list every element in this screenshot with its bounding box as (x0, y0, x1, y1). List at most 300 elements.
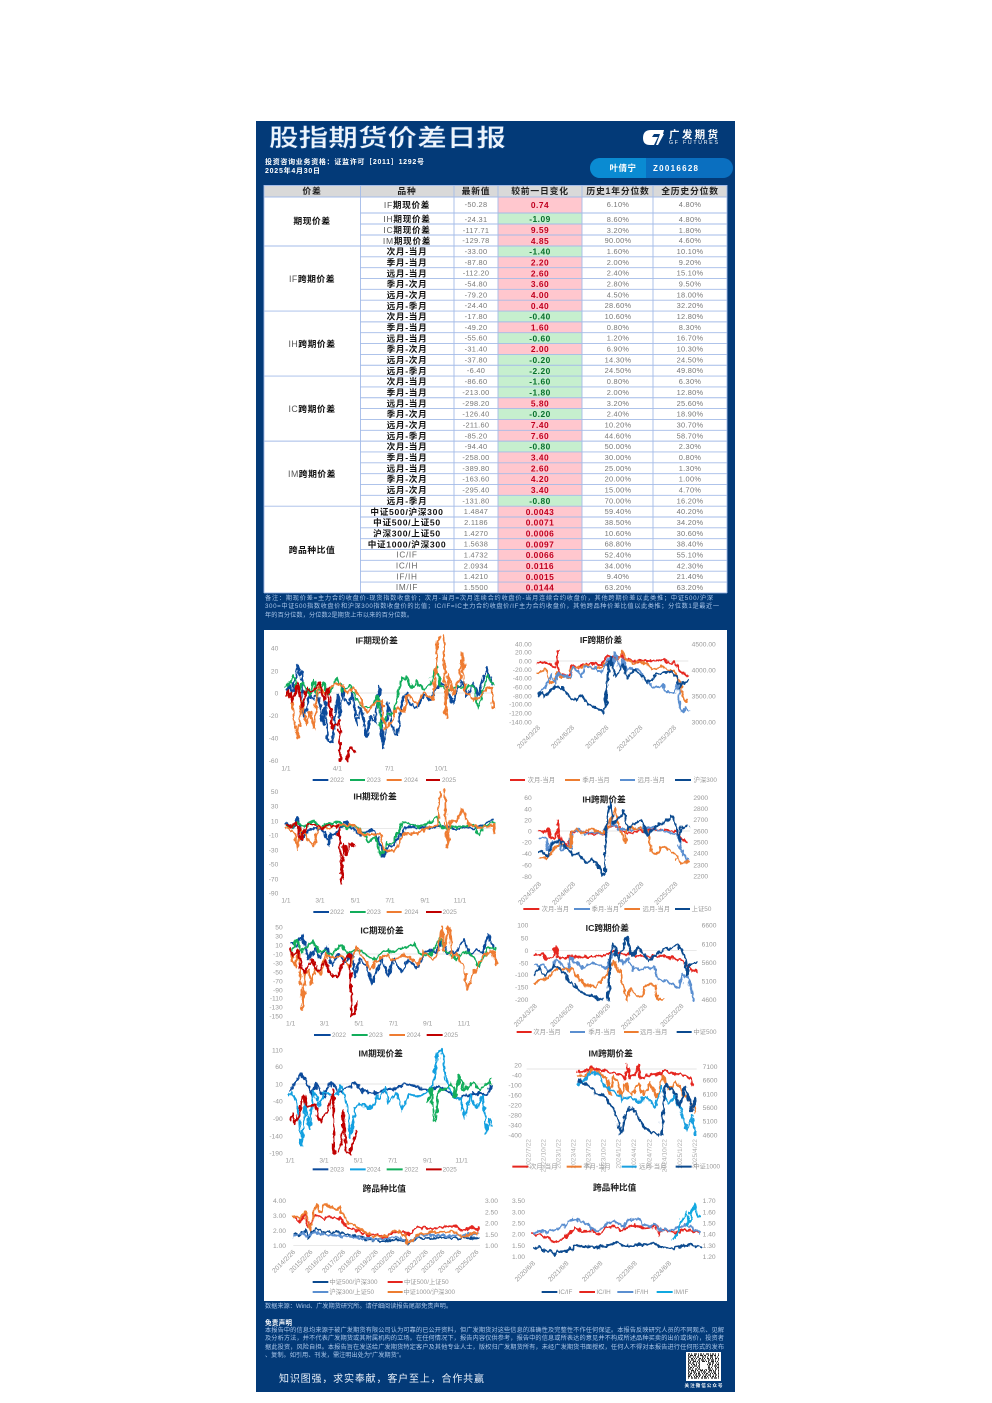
block: IC跨期价差 rows: -126.40 (462, 410, 490, 419)
chart: IM跨期价差: 6100 (703, 1091, 718, 1098)
chart: IC期现价差: IC期现价差 (360, 924, 404, 935)
block: IF跨期价差 rows: 2.40% (607, 269, 629, 278)
block: IM跨期价差 rows: 远月-当月 (387, 462, 427, 473)
chart: 跨品种比值 right: 3.50 (512, 1198, 525, 1205)
block: IC跨期价差 rows: -1.60 (529, 377, 551, 387)
chart: IM跨期价差: -40 (512, 1072, 522, 1079)
chart: IF跨期价差: 2024/3/28 (516, 724, 542, 750)
chart: 跨品种比值 left: 2019/2/26 (354, 1249, 380, 1275)
block: 跨品种比值 rows: 中证500/上证50 (373, 517, 441, 528)
block: IC跨期价差 rows: 25.60% (677, 399, 704, 408)
block: IM跨期价差 rows: 50.00% (605, 442, 632, 451)
chart: IF期现价差: 7/1 (385, 765, 394, 772)
chart: IC期现价差 (269, 924, 496, 1039)
block: IC跨期价差 rows: 季月-次月 (387, 408, 427, 419)
legend (523, 904, 712, 913)
table footnote: 300=中证500指数收盘价和沪深300指数收盘价的比值；IC/IF=IC主力合约收盘价/IF主力合约收盘价，其他跨品种价差比值以此类推；分位数1是最近一 (265, 602, 719, 610)
chart: IH跨期价差: 2024/3/28 (517, 881, 543, 907)
chart: IC期现价差: 9/1 (423, 1020, 433, 1027)
block: IC跨期价差 rows: 30.70% (677, 420, 704, 429)
block: 期现价差 rows (383, 197, 701, 246)
block: IF跨期价差 rows: -33.00 (465, 247, 487, 256)
block: IF跨期价差 rows: 32.20% (677, 301, 704, 310)
chart: 跨品种比值 left: 2.00 (485, 1221, 498, 1228)
block: IM跨期价差 rows: 15.00% (605, 485, 632, 494)
block: IH跨期价差 rows: -17.80 (465, 312, 487, 321)
chart: IM跨期价差: 2022/10/22 (540, 1139, 547, 1172)
row labels: left column: 期现价差 (293, 215, 331, 226)
block: IH跨期价差 rows: 49.80% (677, 366, 704, 375)
chart: IH期现价差: 1/1 (281, 897, 291, 904)
block: IH跨期价差 rows: 次月-当月 (387, 311, 427, 322)
block: IH跨期价差 rows: -49.20 (465, 323, 487, 332)
legend: IF/IH (635, 1289, 649, 1296)
block: IF跨期价差 rows: 10.10% (677, 247, 704, 256)
icon: QR code (684, 1352, 723, 1389)
chart: IH期现价差: 50 (271, 789, 279, 796)
block: 跨品种比值 rows: 0.0066 (526, 550, 554, 560)
block: IM跨期价差 rows: 4.70% (679, 485, 701, 494)
chart: IM跨期价差: 2023/4/22 (570, 1139, 577, 1169)
block: IH跨期价差 rows: -55.60 (465, 334, 487, 343)
block: 跨品种比值 rows: 38.40% (677, 540, 704, 549)
block: 期现价差 rows: 90.00% (605, 236, 632, 245)
block: 跨品种比值 rows: 9.40% (607, 572, 629, 581)
chart: IH跨期价差: -60 (522, 862, 532, 869)
chart: IC期现价差: -30 (273, 960, 283, 967)
chart: 跨品种比值 right: 2.00 (512, 1232, 525, 1239)
row labels: left column: IF跨期价差 (289, 273, 335, 284)
legend: IC/IH (596, 1289, 611, 1296)
block: IM跨期价差 rows: 25.00% (605, 464, 632, 473)
block: 期现价差 rows: 4.80% (679, 200, 701, 209)
chart: IM期现价差: IM期现价差 (359, 1048, 403, 1059)
block: IC跨期价差 rows: -86.60 (465, 377, 487, 386)
chart: IH期现价差: 30 (271, 803, 279, 810)
block: 跨品种比值 rows: 34.00% (605, 561, 632, 570)
chart: 跨品种比值 right: 1.30 (703, 1243, 716, 1250)
chart: 跨品种比值 right: 2020/6/8 (514, 1260, 537, 1283)
block: 跨品种比值 rows: 63.20% (677, 583, 704, 592)
block: 跨品种比值 rows: 68.80% (605, 540, 632, 549)
block: IC跨期价差 rows: 6.30% (679, 377, 701, 386)
legend: 季月-当月 (583, 1162, 611, 1171)
chart: IH跨期价差: -40 (522, 851, 532, 858)
legend: 2025 (444, 1032, 459, 1039)
table footnote (265, 594, 719, 619)
block: IF跨期价差 rows: 2.60 (531, 268, 549, 278)
chart: IH跨期价差: 40 (524, 806, 532, 813)
block: IF跨期价差 rows: -24.40 (465, 301, 487, 310)
legend: 季月-当月 (588, 1027, 616, 1036)
chart: IF期现价差: -60 (269, 758, 279, 765)
block: IH跨期价差 rows: -6.40 (467, 366, 485, 375)
block: IH跨期价差 rows: 1.60 (531, 322, 549, 332)
chart: 跨品种比值 right: 1.70 (703, 1198, 716, 1205)
block: IH跨期价差 rows: 24.50% (677, 355, 704, 364)
block: IM跨期价差 rows: 4.20 (531, 474, 549, 484)
block: 跨品种比值 rows: 中证1000/沪深300 (368, 538, 446, 549)
legend: 中证500/沪深300 (329, 1277, 378, 1286)
block: IM跨期价差 rows: 1.00% (679, 475, 701, 484)
panel: spread table (264, 185, 727, 593)
legend (512, 1162, 721, 1171)
chart: IH期现价差: 3/1 (315, 897, 325, 904)
block: 期现价差 rows: 4.80% (679, 215, 701, 224)
block: 跨品种比值 rows: 0.0015 (526, 572, 554, 582)
chart: 跨品种比值 right: 2024/6/8 (650, 1260, 673, 1283)
block: IC跨期价差 rows: 2.40% (607, 410, 629, 419)
block: IC跨期价差 rows (387, 376, 704, 441)
chart: IF跨期价差: -60.00 (513, 684, 532, 691)
chart: IC跨期价差: 6100 (702, 941, 717, 948)
block: IM跨期价差 rows: 次月-当月 (387, 441, 427, 452)
block: IH跨期价差 rows: -2.20 (529, 366, 551, 376)
legend: 沪深300 (694, 775, 717, 784)
chart: IH期现价差: -70 (269, 876, 279, 883)
block: 跨品种比值 rows: 52.40% (605, 551, 632, 560)
block: IM跨期价差 rows: -0.80 (529, 442, 551, 452)
chart: 跨品种比值 left: 2018/2/26 (337, 1249, 363, 1275)
chart: IH期现价差: -50 (269, 861, 279, 868)
block: IH跨期价差 rows: 2.00 (531, 344, 549, 354)
block: 跨品种比值 rows: 0.0043 (526, 507, 554, 517)
chart: IF跨期价差: -100.00 (509, 701, 532, 708)
chart: IC期现价差: -150 (269, 1013, 283, 1020)
chart: IF期现价差 (269, 634, 493, 784)
licence text and date (265, 157, 424, 175)
chart: IF跨期价差: -140.00 (509, 719, 532, 726)
chart: 跨品种比值 right: 1.20 (703, 1254, 716, 1261)
block: 期现价差 rows: 4.60% (679, 236, 701, 245)
chart: IM期现价差: -90 (273, 1116, 283, 1123)
chart: IH跨期价差: -80 (522, 874, 532, 881)
block: IF跨期价差 rows: 3.60 (531, 279, 549, 289)
block: IH跨期价差 rows: 10.60% (605, 312, 632, 321)
block: 跨品种比值 rows: IC/IH (396, 562, 418, 571)
chart: IC跨期价差: 6600 (702, 923, 717, 930)
block: IC跨期价差 rows: 18.90% (677, 410, 704, 419)
legend: 2024 (404, 777, 419, 784)
legend: 次月-当月 (530, 1162, 557, 1171)
chart: IH跨期价差: IH跨期价差 (582, 793, 626, 804)
chart: IH期现价差: -90 (269, 891, 279, 898)
chart: IC跨期价差: 2024/9/28 (586, 1003, 612, 1029)
chart: IM期现价差: 9/1 (423, 1157, 433, 1164)
legend: 2024 (367, 1166, 381, 1173)
chart: IF跨期价差: 3500.00 (692, 693, 716, 700)
chart: IM期现价差: 5/1 (354, 1157, 363, 1164)
block: 跨品种比值 rows (368, 506, 704, 593)
chart: IH期现价差: 5/1 (351, 897, 360, 904)
block: IF跨期价差 rows: -54.80 (465, 280, 487, 289)
block: IF跨期价差 rows: 0.40 (531, 301, 549, 311)
chart: IM跨期价差: -100 (508, 1082, 522, 1089)
block: 期现价差 rows: -117.71 (463, 226, 489, 235)
block: IC跨期价差 rows: 季月-当月 (387, 387, 427, 398)
block: IC跨期价差 rows: 2.00% (607, 388, 629, 397)
block: IM跨期价差 rows: 季月-当月 (387, 452, 427, 463)
chart: IH跨期价差 (517, 793, 712, 913)
chart: IC期现价差: -10 (273, 951, 283, 958)
chart: IM跨期价差: IM跨期价差 (589, 1048, 633, 1059)
chart: IH跨期价差: 2025/3/28 (654, 881, 680, 907)
chart: IC跨期价差: IC跨期价差 (586, 922, 629, 933)
block: 期现价差 rows: 4.85 (531, 236, 549, 246)
block: IC跨期价差 rows: 0.80% (607, 377, 629, 386)
chart: IC期现价差: 1/1 (286, 1020, 296, 1027)
block: IC跨期价差 rows: 58.70% (677, 431, 704, 440)
block: 期现价差 rows: IM期现价差 (383, 235, 431, 246)
row labels: left column: IH跨期价差 (288, 338, 336, 349)
legend: 远月-当月 (639, 1162, 666, 1171)
block: IF跨期价差 rows: 远月-次月 (387, 289, 427, 300)
table header row: 品种 (397, 185, 417, 196)
row labels: left column: 跨品种比值 (289, 544, 335, 555)
block: IF跨期价差 rows: 远月-季月 (387, 300, 427, 311)
block: IH跨期价差 rows: 16.70% (677, 334, 704, 343)
block: 跨品种比值 rows: IC/IF (396, 551, 418, 560)
table footnote: 备注：期现价差=主力合约收盘价-现货指数收盘价；次月-当月=次月连续合约收盘价-当月连续合约收盘价，其他跨期价差以此类推；中证500/沪深 (265, 594, 713, 602)
chart: IM跨期价差: 2024/10/22 (661, 1139, 668, 1172)
chart: IH跨期价差: 2024/6/28 (551, 881, 577, 907)
legend (313, 1277, 456, 1296)
report background panel (256, 121, 735, 1392)
chart: IM跨期价差: 2023/7/22 (585, 1139, 592, 1169)
logo: GF Futures: GF FUTURES (669, 140, 719, 146)
chart: IM跨期价差 (508, 1048, 721, 1172)
chart: IH期现价差: IH期现价差 (353, 790, 397, 801)
chart: IH期现价差: -10 (269, 832, 279, 839)
chart: IF跨期价差: 4500.00 (692, 641, 716, 648)
chart: IF跨期价差: 40.00 (515, 641, 532, 648)
chart: IM期现价差: -40 (273, 1099, 283, 1106)
block: IM跨期价差 rows: 3.40 (531, 453, 549, 463)
block: IC跨期价差 rows: -1.80 (529, 388, 551, 398)
chart: IC跨期价差: 5100 (702, 978, 717, 985)
chart: IC跨期价差: 5600 (702, 960, 717, 967)
block: 跨品种比值 rows: 55.10% (677, 551, 704, 560)
block: IM跨期价差 rows: 3.40 (531, 485, 549, 495)
block: IF跨期价差 rows: 9.50% (679, 280, 701, 289)
block: IH跨期价差 rows: 14.30% (605, 355, 632, 364)
block: IC跨期价差 rows: 7.60 (531, 431, 549, 441)
block: 期现价差 rows: -129.78 (462, 236, 490, 245)
block: IM跨期价差 rows: 30.00% (605, 453, 632, 462)
chart: IM跨期价差: -280 (508, 1112, 522, 1119)
chart: IM跨期价差: 7100 (703, 1064, 718, 1071)
chart: IC跨期价差 (513, 922, 717, 1036)
chart: IC跨期价差: 2024/12/28 (620, 1003, 649, 1031)
chart: IC跨期价差: 50 (521, 935, 529, 942)
chart: IM跨期价差: 2024/1/22 (615, 1139, 622, 1169)
chart: 跨品种比值 left: 2021/2/26 (387, 1249, 413, 1275)
block: 跨品种比值 rows: 1.5638 (464, 540, 488, 549)
block: IH跨期价差 rows: -37.80 (465, 355, 487, 364)
block: 跨品种比值 rows: IM/IF (396, 583, 418, 592)
block: IC跨期价差 rows: -85.20 (465, 431, 487, 440)
chart: IC跨期价差: 0 (525, 948, 529, 955)
block: IH跨期价差 rows: 远月-季月 (387, 365, 427, 376)
table header row: 全历史分位数 (661, 185, 719, 196)
chart: 跨品种比值 right: 2022/6/8 (581, 1260, 605, 1283)
legend: 次月-当月 (533, 1027, 561, 1036)
chart: 跨品种比值 left: 2024/2/26 (437, 1249, 463, 1275)
block: IC跨期价差 rows: 远月-次月 (387, 419, 427, 430)
chart: 跨品种比值 left: 2025/2/26 (455, 1249, 481, 1275)
legend: 中证1000 (693, 1162, 721, 1171)
chart: IM跨期价差: -340 (508, 1122, 522, 1129)
block: 跨品种比值 rows: 1.5500 (464, 583, 488, 592)
chart: IH期现价差: 11/1 (454, 897, 467, 904)
block: IC跨期价差 rows: 44.60% (605, 431, 632, 440)
chart: IH跨期价差: -20 (522, 840, 532, 847)
chart: IM跨期价差: 2025/4/22 (692, 1139, 699, 1169)
chart: 跨品种比值 right: 1.00 (512, 1254, 525, 1261)
legend: 2025 (443, 909, 457, 916)
block: IH跨期价差 rows: 12.80% (677, 312, 704, 321)
chart: IF跨期价差: -120.00 (509, 710, 532, 717)
legend: 中证1000/沪深300 (403, 1287, 456, 1296)
block: 跨品种比值 rows: 0.0097 (526, 539, 554, 549)
block: IH跨期价差 rows: -31.40 (465, 345, 487, 354)
block: 期现价差 rows: IC期现价差 (383, 224, 431, 235)
legend: 2024 (407, 1032, 421, 1039)
block: IF跨期价差 rows: 季月-次月 (387, 278, 427, 289)
legend: IM/IF (674, 1289, 689, 1296)
chart: IC跨期价差: 2025/3/28 (660, 1003, 686, 1029)
disclaimer: 本报告中的信息均来源于被广发期货有限公司认为可靠的已公开资料，但广发期货对这些信息的准确性及完整性不作任何保证。本报告反映研究人员的不同观点、见解 (265, 1326, 724, 1334)
chart: IM期现价差: 11/1 (455, 1157, 468, 1164)
chart: IM期现价差: 110 (272, 1047, 283, 1054)
block: 跨品种比值 rows: 沪深300/上证50 (373, 527, 441, 538)
chart: IH跨期价差: 2024/12/28 (617, 881, 646, 909)
legend: 远月-当月 (643, 904, 670, 913)
chart: IF跨期价差: IF跨期价差 (580, 634, 622, 645)
chart: IC跨期价差: -150 (515, 985, 529, 992)
legend: 2023 (369, 1032, 383, 1039)
title: 股指期货价差日报 (269, 125, 506, 152)
block: IC跨期价差 rows: -0.20 (529, 409, 551, 419)
block: IM跨期价差 rows: 0.80% (679, 453, 701, 462)
table header row: 较前一日变化 (511, 185, 569, 196)
disclaimer: 及分析方法，并不代表广发期货或其附属机构的立场。在任何情况下，报告内容仅供参考，报告中的信息或所表达的意见并不构成所述品种买卖的出价或询价，投资者 (265, 1334, 724, 1342)
block: IM跨期价差 rows: 20.00% (605, 475, 632, 484)
block: 跨品种比值 rows: 1.4210 (464, 572, 488, 581)
block: IH跨期价差 rows: 8.30% (679, 323, 701, 332)
chart: IF跨期价差: 0.00 (519, 658, 532, 665)
chart: IM跨期价差: 4600 (703, 1132, 718, 1139)
chart: IC跨期价差: 2024/3/28 (513, 1003, 539, 1029)
disclaimer: 免责声明 (265, 1318, 292, 1327)
block: IC跨期价差 rows: 远月-季月 (387, 430, 427, 441)
chart: 跨品种比值 right: 2021/6/8 (547, 1260, 571, 1283)
chart: 跨品种比值 left: 2016/2/26 (305, 1249, 331, 1275)
chart: IC期现价差: -50 (273, 969, 283, 976)
block: 跨品种比值 rows: 0.0116 (526, 561, 554, 571)
chart: 跨品种比值 left: 2017/2/26 (321, 1249, 347, 1275)
block: 期现价差 rows: -50.28 (465, 200, 487, 209)
block: IH跨期价差 rows: 24.50% (605, 366, 632, 375)
block: 跨品种比值 rows: 30.60% (677, 529, 704, 538)
block: IM跨期价差 rows: 1.30% (679, 464, 701, 473)
block: IH跨期价差 rows: 0.80% (607, 323, 629, 332)
chart: IH跨期价差: 2024/9/28 (586, 881, 612, 907)
block: IH跨期价差 rows: 远月-当月 (387, 332, 427, 343)
block: IH跨期价差 rows: 10.30% (677, 345, 704, 354)
legend (510, 775, 717, 784)
chart: IM期现价差: -190 (269, 1151, 283, 1158)
chart: 跨品种比值 left: 1.50 (485, 1232, 498, 1239)
chart: IM跨期价差: 20 (514, 1062, 522, 1069)
chart: 跨品种比值 left: 2.50 (485, 1209, 498, 1216)
chart: 跨品种比值 left: 2023/2/26 (421, 1249, 447, 1275)
block: IM跨期价差 rows: -295.40 (462, 485, 490, 494)
block: IM跨期价差 rows: 2.60 (531, 463, 549, 473)
block: IC跨期价差 rows: -211.60 (463, 420, 489, 429)
block: IM跨期价差 rows: 季月-次月 (387, 473, 427, 484)
chart: IH期现价差: 9/1 (420, 897, 430, 904)
author pill (590, 158, 733, 178)
chart: IF跨期价差: 2024/9/28 (585, 724, 611, 750)
block: 跨品种比值 rows: 0.0006 (526, 528, 554, 538)
legend (542, 1289, 689, 1296)
disclaimer: 、复制。如引用、刊发，需注明出处为“广发期货”。 (265, 1351, 405, 1359)
table header row: 最新值 (462, 185, 490, 196)
chart: IM期现价差: 60 (275, 1064, 283, 1071)
chart: IF期现价差: IF期现价差 (356, 634, 398, 645)
row labels: left column: IM跨期价差 (288, 468, 336, 479)
chart: IC跨期价差: 4600 (702, 997, 717, 1004)
block: IC跨期价差 rows: 次月-当月 (387, 376, 427, 387)
licence text and date: 投资咨询业务资格：证监许可［2011］1292号 (265, 157, 424, 166)
block: 跨品种比值 rows: 1.4270 (464, 529, 488, 538)
block: 跨品种比值 rows: 1.4732 (464, 551, 488, 560)
chart: 跨品种比值 left: 3.00 (273, 1213, 286, 1220)
chart: IM期现价差: 1/1 (285, 1157, 295, 1164)
block: 期现价差 rows: -24.31 (465, 215, 487, 224)
chart: IM期现价差: 3/1 (319, 1157, 329, 1164)
chart: 跨品种比值 left: 2.00 (273, 1228, 286, 1235)
licence text and date: 2025年4月30日 (265, 166, 320, 175)
row labels: left column: IC跨期价差 (288, 403, 336, 414)
chart: IC期现价差: 5/1 (354, 1020, 364, 1027)
chart: IF期现价差: -20 (269, 713, 279, 720)
chart: IM跨期价差: 5600 (703, 1105, 718, 1112)
table header row: 历史1年分位数 (586, 185, 650, 196)
chart: IH跨期价差: 0 (528, 828, 532, 835)
legend: 2025 (443, 1166, 457, 1173)
legend: 2025 (442, 777, 457, 784)
disclaimer: 据此投资，风险自担。本报告旨在发送给广发期货特定客户及其他专业人士，版权归广发期货所有，未经广发期货书面授权，任何人不得对本报告进行任何形式的发布 (265, 1343, 724, 1351)
chart: 跨品种比值 left: 1.00 (273, 1243, 286, 1250)
block: IF跨期价差 rows: 9.20% (679, 258, 701, 267)
block: IF跨期价差 rows: 2.20 (531, 257, 549, 267)
legend: 季月-当月 (582, 775, 610, 784)
chart: IH期现价差 (269, 789, 494, 916)
block: IH跨期价差 rows (387, 311, 704, 376)
legend: 中证500 (693, 1027, 717, 1036)
block: IH跨期价差 rows: 远月-次月 (387, 354, 427, 365)
legend (313, 909, 457, 916)
block: IC跨期价差 rows: 10.20% (605, 420, 632, 429)
logo: GF Futures: 广发期货 (669, 128, 718, 141)
block: IF跨期价差 rows: 季月-当月 (387, 256, 427, 267)
table header row: 价差 (302, 185, 322, 196)
block: 跨品种比值 rows: 40.20% (677, 507, 704, 516)
author pill: 叶倩宁 (609, 163, 637, 173)
chart: IM跨期价差: 2022/7/22 (525, 1139, 532, 1169)
